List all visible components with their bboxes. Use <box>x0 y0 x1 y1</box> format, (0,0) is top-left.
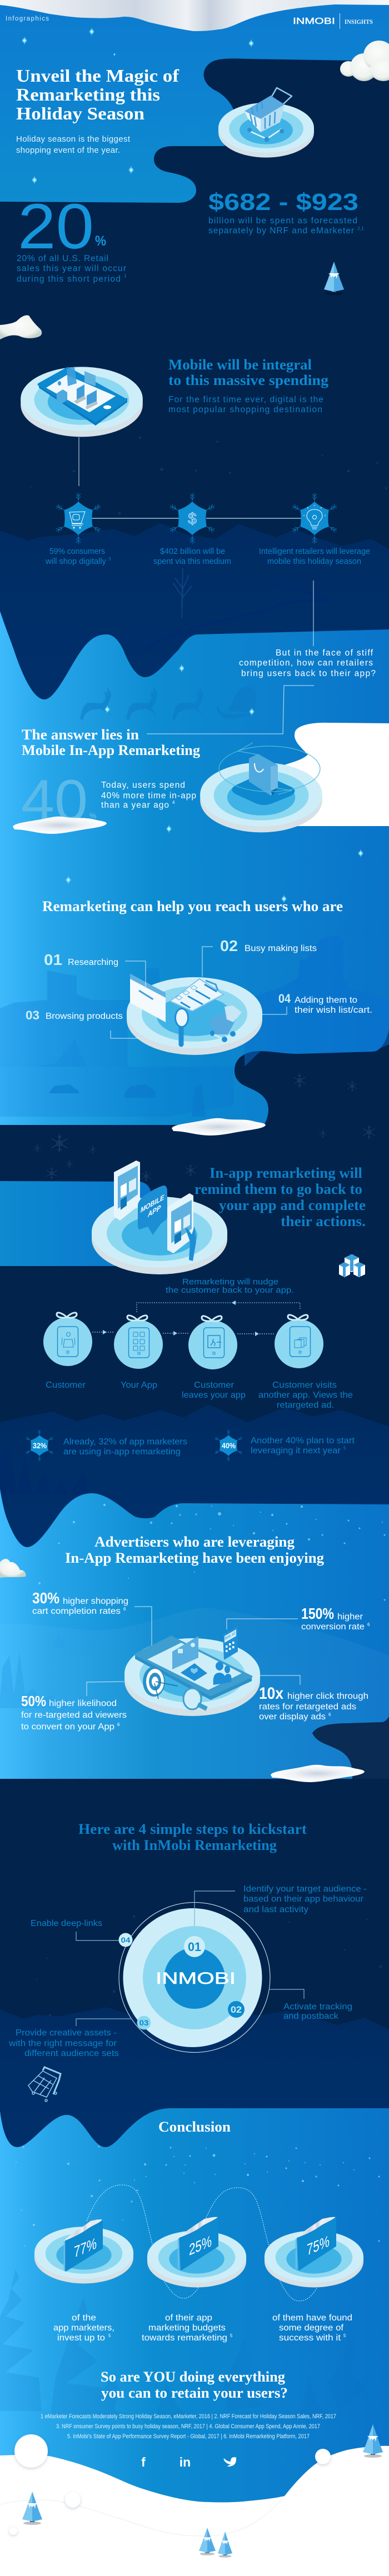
snow ridge <box>0 2496 285 2536</box>
callout: 50 percent: for re-targeted ad viewers <box>21 1710 127 1720</box>
heading: remind: remind them to go back to <box>194 1181 362 1197</box>
text: hexagon captions: mobile this holiday season <box>267 557 361 566</box>
platform: shopping cart <box>218 88 314 158</box>
snow drift <box>172 1118 266 1136</box>
arrow: loop back <box>137 1300 300 1312</box>
callout: 30 percent <box>32 1589 152 1645</box>
callout: identify: and last activity <box>243 1905 308 1914</box>
logo: InMobi Insights: INMOBI <box>293 17 335 26</box>
icon: twitter <box>224 2457 236 2467</box>
text: 40 percent: 40% more time in-app <box>101 791 196 801</box>
text: hexagon captions: $402 billion will be <box>160 547 225 556</box>
arrow: dashed wave <box>87 2185 319 2301</box>
step 03 <box>137 2015 151 2030</box>
arrow: connector down <box>78 437 79 486</box>
icon: target <box>143 1667 178 1699</box>
stat: 40 percent plan: leveraging it next year <box>251 1446 341 1455</box>
heading: conclusion: Conclusion <box>158 2119 231 2135</box>
heading: remind <box>194 1164 366 1229</box>
subtitle: shopping event of the year. <box>16 146 120 155</box>
ornament: another app <box>275 1315 323 1368</box>
heading: 4 steps: Here are 4 simple steps to kickstart <box>78 1821 307 1837</box>
tree: bare faint <box>173 568 192 618</box>
silhouette: city skyline <box>0 935 389 1117</box>
callout: deep-links: Enable deep-links <box>31 1919 102 1928</box>
callout: 30 percent: 30% <box>32 1589 59 1607</box>
panel: hero sky <box>0 0 389 203</box>
heading: remind: their actions. <box>281 1213 366 1229</box>
pines faint <box>0 1633 89 1708</box>
panel: retargeting sky <box>0 611 389 1125</box>
title: Remarketing this <box>16 85 160 104</box>
snowflakes <box>33 1073 375 1182</box>
logo: InMobi: INMOBI <box>156 1969 236 1988</box>
diagram: steps circle <box>119 1902 270 2052</box>
icon: rounded app tile <box>232 774 295 805</box>
stat: 20 percent: 20% of all U.S. Retail <box>17 254 108 263</box>
text: stat captions: towards remarketing <box>142 2333 227 2343</box>
line: connector question <box>313 581 314 646</box>
text: flow labels: Customer visits <box>272 1380 337 1390</box>
snow drift <box>13 817 107 834</box>
icon: calculator <box>223 1626 238 1660</box>
heading: closing question: So are YOU doing everything <box>101 2369 285 2385</box>
stars: answer <box>66 664 363 903</box>
stat: 32 percent: are using in-app remarketing <box>63 1447 181 1457</box>
icon: browser window <box>130 974 166 1022</box>
icon: users <box>213 1662 232 1685</box>
text: mobile: most popular shopping destination <box>168 405 322 414</box>
stat: 25 percent: 25% <box>189 2233 212 2259</box>
callout: 03 browsing <box>26 1008 146 1038</box>
ornament: your app <box>114 1315 163 1369</box>
icon: phone <box>135 1637 252 1700</box>
callout: 150 percent <box>227 1605 370 1632</box>
callout: 02 lists: 02 <box>220 937 238 954</box>
stat: 75 percent <box>265 2217 363 2287</box>
callout: 10x: 6 <box>328 1712 331 1717</box>
callout: 50 percent: 6 <box>117 1722 120 1727</box>
text: nudge <box>166 1277 294 1295</box>
logo: InMobi Insights <box>293 13 373 29</box>
text: mobile: For the first time ever, digital is the <box>168 395 323 404</box>
callout: 150 percent: 6 <box>367 1622 370 1627</box>
text: mobile <box>168 395 323 414</box>
text: references: 5. InMobi's State of App Performance Survey Report - Global, 2017 | 6. InMobi Remarketing Platform, 2017 <box>67 2433 310 2440</box>
ornament: customer leaves <box>188 1316 237 1369</box>
text: 40 percent: 4 <box>172 800 175 805</box>
icon: cart <box>210 1006 242 1042</box>
text: stat captions: invest up to <box>57 2333 105 2343</box>
stat: 20 percent: 1 <box>124 273 127 278</box>
heading: advertisers: Advertisers who are leveraging <box>94 1534 295 1550</box>
icon: card <box>172 1636 198 1669</box>
text: nudge: Remarketing will nudge <box>182 1277 278 1287</box>
text: stat captions: app marketers, <box>53 2323 114 2333</box>
callout: tracking <box>269 1989 352 2021</box>
panel: band behind app platform <box>0 1181 151 1266</box>
heading: closing question: you can to retain your users? <box>101 2385 288 2401</box>
callout: 04 adding <box>262 992 372 1015</box>
text: references <box>41 2413 336 2440</box>
platform: mobile app <box>92 1161 227 1274</box>
text: 40 percent: Today, users spend <box>101 781 185 790</box>
text: question: competition, how can retailers <box>239 658 373 668</box>
text: flow labels: Customer <box>46 1380 86 1390</box>
callout: 150 percent: 150% <box>301 1605 334 1622</box>
icon: phone left <box>114 1161 140 1221</box>
stat: 77 percent <box>34 2219 133 2283</box>
callout: 02 lists <box>202 937 317 977</box>
icon: checklist <box>170 979 223 1011</box>
icon: magnifier <box>183 1688 207 1709</box>
stat: 40 percent plan: 5 <box>343 1445 346 1450</box>
stars: hero <box>22 27 254 184</box>
callout: 04 adding: 04 <box>278 992 291 1006</box>
text: stat captions: 5 <box>108 2333 111 2338</box>
logo: InMobi Insights: INSIGHTS <box>345 18 373 26</box>
callout: 10x: 10x <box>259 1684 283 1703</box>
pines faint <box>0 2269 367 2417</box>
text: references: 3. NRF onsumer Survey points to busy holiday season, NRF, 2017 | 4. Global Consumer App Spend, App Annie, 2017 <box>56 2423 320 2430</box>
callout: 04 adding: Adding them to <box>295 996 357 1005</box>
night dots <box>30 437 387 514</box>
snowballs <box>9 2434 331 2535</box>
text: stat captions <box>53 2313 352 2343</box>
subtitle: Holiday season is the biggest <box>16 134 131 144</box>
mountains: first range <box>0 523 389 722</box>
callout: tracking: Activate tracking <box>283 2002 352 2012</box>
callout: creative assets: different audience sets <box>24 2049 119 2058</box>
callout: creative assets <box>8 2019 132 2058</box>
platform: remarketing stages <box>127 974 262 1055</box>
panel: results sky <box>0 1489 389 1779</box>
callout: 30 percent: higher shopping <box>63 1597 128 1606</box>
text: hexagon captions <box>45 547 370 566</box>
callout: 01 researching: 01 <box>44 951 62 968</box>
callout: identify <box>194 1884 367 1926</box>
callout: 03 browsing: 03 <box>26 1008 39 1022</box>
callout: 50 percent: 50% <box>21 1693 46 1709</box>
stat: 20 percent: during this short period <box>17 274 121 284</box>
heading: answer: The answer lies in <box>22 727 139 743</box>
stat: 40 percent: 40 <box>21 768 88 833</box>
text: question: But in the face of stiff <box>276 648 373 658</box>
text: flow labels: Customer <box>194 1380 235 1390</box>
icon: heart tile <box>181 1663 207 1681</box>
icon: shopping bag <box>249 754 278 796</box>
callout: 01 researching <box>44 951 146 989</box>
text: flow labels: another app. Views the <box>258 1390 353 1400</box>
heading: reach users: Remarketing can help you reach users who are <box>42 898 343 914</box>
title <box>16 66 179 123</box>
ornament: customer <box>43 1313 92 1366</box>
night dots <box>36 1915 382 2016</box>
callout: 10x: over display ads <box>259 1712 326 1722</box>
callout: deep-links <box>31 1919 119 1940</box>
stat: 20 percent <box>17 191 127 284</box>
arrow: orbit ring <box>219 743 320 794</box>
callout: 02 lists: Busy making lists <box>245 944 317 953</box>
heading: 4 steps <box>78 1821 307 1853</box>
header label: Infographics <box>6 16 49 22</box>
callout: 10x <box>259 1675 368 1722</box>
title: Holiday Season <box>16 104 145 123</box>
snow ground <box>0 2446 389 2576</box>
callout: 03 browsing: Browsing products <box>46 1012 123 1021</box>
heading: answer: Mobile In-App Remarketing <box>22 742 200 758</box>
silhouette: cars <box>49 1083 206 1117</box>
callout: 150 percent: conversion rate <box>301 1622 365 1632</box>
stat: spend range: $682 - $923 <box>208 189 358 216</box>
white snow bank <box>278 723 389 826</box>
tree: night <box>324 262 344 295</box>
stat: 40 percent plan: 40% <box>222 1442 236 1450</box>
callout: 10x: higher click through <box>287 1692 368 1701</box>
subtitle <box>16 134 131 155</box>
snow particles: conclusion <box>16 2145 380 2247</box>
heading: 4 steps: with InMobi Remarketing <box>112 1837 277 1853</box>
arrow: connector to heading <box>147 686 314 734</box>
callout: creative assets: with the right message for <box>8 2039 117 2048</box>
stat: 40 percent: % <box>89 811 97 820</box>
icon: cart hexagon <box>55 493 102 544</box>
callout: 01 researching: Researching <box>68 958 118 967</box>
icon: bulb hexagon <box>291 493 338 544</box>
icon: person <box>185 1227 196 1261</box>
callout: 30 percent: 6 <box>123 1607 126 1612</box>
text: hexagon captions: 59% consumers <box>49 547 105 556</box>
callout: 50 percent: to convert on your App <box>21 1722 114 1732</box>
step 04 <box>119 1933 132 1947</box>
icon: facebook: f <box>141 2455 146 2469</box>
icon: shopping cart <box>245 88 292 142</box>
heading: closing question <box>101 2369 288 2401</box>
text: stat captions: marketing budgets <box>148 2323 226 2333</box>
icon: gift boxes <box>339 1254 365 1277</box>
stat: 20 percent: sales this year will occur <box>17 264 126 273</box>
text: stat captions: of the <box>72 2313 96 2323</box>
text: question <box>239 648 376 678</box>
text: question: bring users back to their app? <box>241 669 376 678</box>
snow particles: results <box>38 1504 386 1601</box>
text: flow labels: leaves your app <box>182 1390 246 1400</box>
text: hexagon captions: 3 <box>108 557 111 562</box>
text: hexagon captions: spent via this medium <box>153 557 231 566</box>
cloud: top right <box>340 41 389 81</box>
icon: phone right <box>167 1193 193 1253</box>
stat: 25 percent <box>147 2217 246 2287</box>
text: flow labels <box>46 1380 353 1410</box>
heading: remind: In-app remarketing will <box>210 1164 362 1181</box>
stat: 20 percent: % <box>95 233 106 249</box>
icon: magnifier <box>174 1008 189 1044</box>
callout: 150 percent: higher <box>337 1612 363 1622</box>
stat: 32 percent: Already, 32% of app marketers <box>63 1437 187 1447</box>
stat: 75 percent: 75% <box>307 2233 330 2259</box>
icon: wire cart <box>28 2067 61 2102</box>
text: stat captions: some degree of <box>279 2323 344 2333</box>
pines faint <box>0 1444 89 1494</box>
icon: linkedin: in <box>179 2455 191 2469</box>
text: stat captions: 5 <box>343 2333 346 2338</box>
title: Unveil the Magic of <box>16 66 179 86</box>
callout: identify: based on their app behaviour <box>243 1894 363 1904</box>
stat: 40 percent plan: Another 40% plan to start <box>251 1436 355 1445</box>
hills faint <box>0 1608 389 1779</box>
text: 40 percent: than a year ago <box>101 801 169 810</box>
callout: 50 percent <box>21 1682 127 1732</box>
text: stat captions: 5 <box>230 2333 233 2338</box>
platform: phone store <box>21 367 143 437</box>
callout: identify: Identify your target audience - <box>243 1884 367 1894</box>
mountains: second range <box>0 1404 389 1555</box>
text: flow labels: retargeted ad. <box>277 1400 334 1410</box>
step 02: 02 <box>231 2004 242 2015</box>
icon: speech bubble: MOBILE <box>141 1193 164 1214</box>
text: references: 1 eMarketer Forecasts Moderately Strong Holiday Season, eMarketer, 2016 | 2. NRF Forecast for Holiday Season Sales, NRF, 2017 <box>41 2413 336 2420</box>
snow edge top <box>0 0 389 31</box>
cloud: left <box>0 315 42 339</box>
stat: 32 percent <box>25 1429 187 1462</box>
heading: mobile: to this massive spending <box>168 372 328 388</box>
heading: advertisers: In-App Remarketing have been enjoying <box>65 1550 324 1566</box>
snow drift <box>271 1765 365 1782</box>
icon: dollar hexagon <box>169 493 216 544</box>
heading: mobile <box>168 357 328 388</box>
callout: 50 percent: higher likelihood <box>49 1699 117 1708</box>
platform: shopping bag <box>200 743 322 832</box>
stat: spend range <box>208 189 364 236</box>
step 02 <box>228 2001 245 2018</box>
text: hexagon captions: Intelligent retailers will leverage <box>259 547 370 556</box>
heading: remind: your app and complete <box>219 1197 366 1213</box>
icon: dollar hexagon: $ <box>188 510 197 527</box>
callout: 30 percent: cart completion rates <box>32 1607 121 1616</box>
stat: 40 percent plan <box>214 1429 355 1462</box>
arrows: flow connectors <box>92 1330 275 1336</box>
callout: 04 adding: their wish list/cart. <box>295 1006 372 1015</box>
trees: foreground <box>22 2424 383 2558</box>
step 01 <box>184 1936 205 1957</box>
text: hexagon captions: will shop digitally <box>45 557 106 566</box>
river faint <box>144 583 328 650</box>
text: stat captions: success with it <box>279 2333 341 2343</box>
step 04: 04 <box>121 1935 131 1944</box>
heading: advertisers <box>65 1534 324 1566</box>
callout: tracking: and postback <box>283 2012 338 2021</box>
text: flow labels: Your App <box>121 1380 157 1390</box>
callout: creative assets: Provide creative assets - <box>16 2028 117 2038</box>
stat: 32 percent: 32% <box>33 1442 47 1450</box>
stat: 77 percent: 77% <box>74 2235 97 2262</box>
icon: phone store <box>39 367 127 426</box>
platform: results <box>124 1626 260 1716</box>
mountains: third range <box>0 2007 389 2167</box>
stat: spend range: 2,1 <box>357 226 364 231</box>
text: 40 percent <box>101 781 196 810</box>
cloud: left <box>0 1559 26 1578</box>
step 01: 01 <box>188 1940 201 1954</box>
text: stat captions: of them have found <box>272 2313 352 2323</box>
step 03: 03 <box>139 2018 149 2027</box>
connector lines between hexagons <box>92 518 302 519</box>
panel: conclusion sky <box>0 2108 389 2576</box>
text: stat captions: of their app <box>165 2313 212 2323</box>
stat: spend range: billion will be spent as forecasted <box>208 216 357 226</box>
stat: 20 percent: 20 <box>18 191 94 262</box>
stat: spend range: separately by NRF and eMarketer <box>208 226 354 236</box>
icon: speech bubble: APP <box>147 1203 161 1219</box>
icon: calculator: $46.42 <box>225 1631 236 1641</box>
text: nudge: the customer back to your app. <box>166 1286 294 1295</box>
icon: speech bubble <box>138 1186 167 1235</box>
heading: mobile: Mobile will be integral <box>168 357 312 373</box>
silhouette: reindeer and sleigh <box>80 687 256 721</box>
heading: answer <box>22 727 200 758</box>
callout: 10x: rates for retargeted ads <box>259 1702 356 1712</box>
